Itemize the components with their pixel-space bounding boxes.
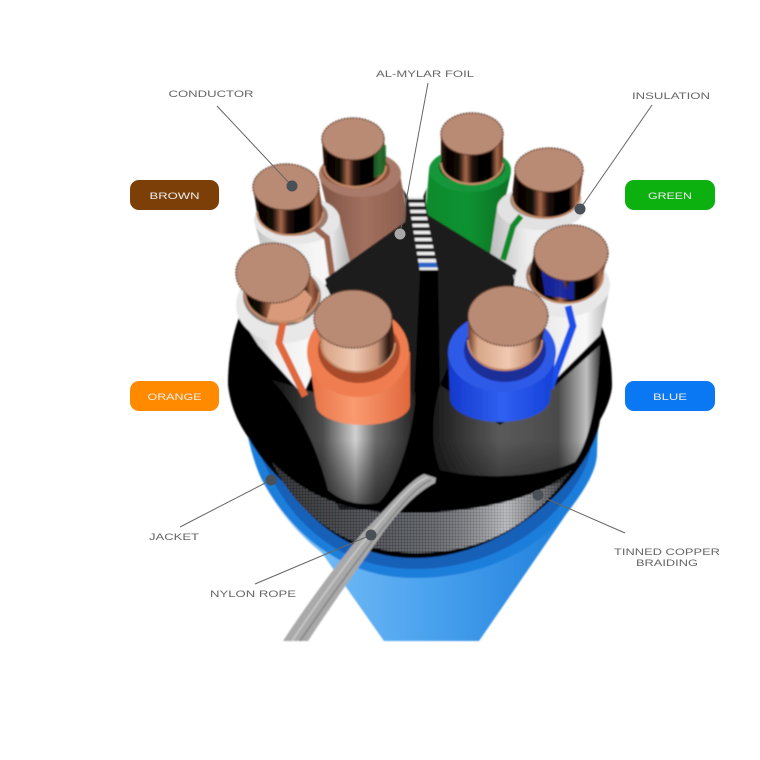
cable illustration [228,113,612,641]
label: jacket [149,474,276,543]
legend pill: green [625,180,715,210]
wire: white with brown stripe [253,164,350,290]
legend pill: orange [130,381,219,411]
label: conductor [168,89,298,192]
shadow over foil base [300,440,590,510]
brown stripe [315,228,332,275]
wire: white with orange stripe [236,243,332,396]
orange stripe [279,322,305,396]
black mylar left panel [325,188,420,400]
wire: brown [319,118,410,275]
central filler strip [408,197,450,400]
label: tinned copper braiding [532,490,720,569]
label: insulation [574,91,710,214]
wire: orange [307,290,410,425]
label: jacket: JACKET [149,532,199,543]
label: tinned copper braiding: BRAIDING [636,558,698,569]
legend pill: orange: ORANGE [148,392,202,403]
left foil shield [272,380,416,504]
legend pill: brown [130,180,219,210]
label: al-mylar foil: AL-MYLAR FOIL [376,69,474,80]
black inner cavity [228,222,612,558]
blue stripe [550,306,573,388]
label: conductor: CONDUCTOR [168,89,254,100]
wire: blue [448,286,556,422]
label: tinned copper braiding: TINNED COPPER [614,547,720,558]
label: nylon rope [210,530,376,600]
legend pill: brown: BROWN [150,191,200,202]
tinned copper braiding [272,462,572,553]
wire: white with green stripe [490,148,585,285]
label: al-mylar foil [376,69,474,240]
legend pill: green: GREEN [648,191,692,202]
label: nylon rope: NYLON ROPE [210,589,296,600]
legend pill: blue [625,381,715,411]
blue cable jacket [248,400,598,641]
wire: green [425,113,511,270]
right foil shield [433,345,600,476]
label: insulation: INSULATION [632,91,710,102]
nylon rope [283,474,436,641]
black mylar right panel [423,188,517,385]
wire: white with blue stripe [513,225,610,395]
green stripe [503,216,521,260]
legend pill: blue: BLUE [653,392,687,403]
